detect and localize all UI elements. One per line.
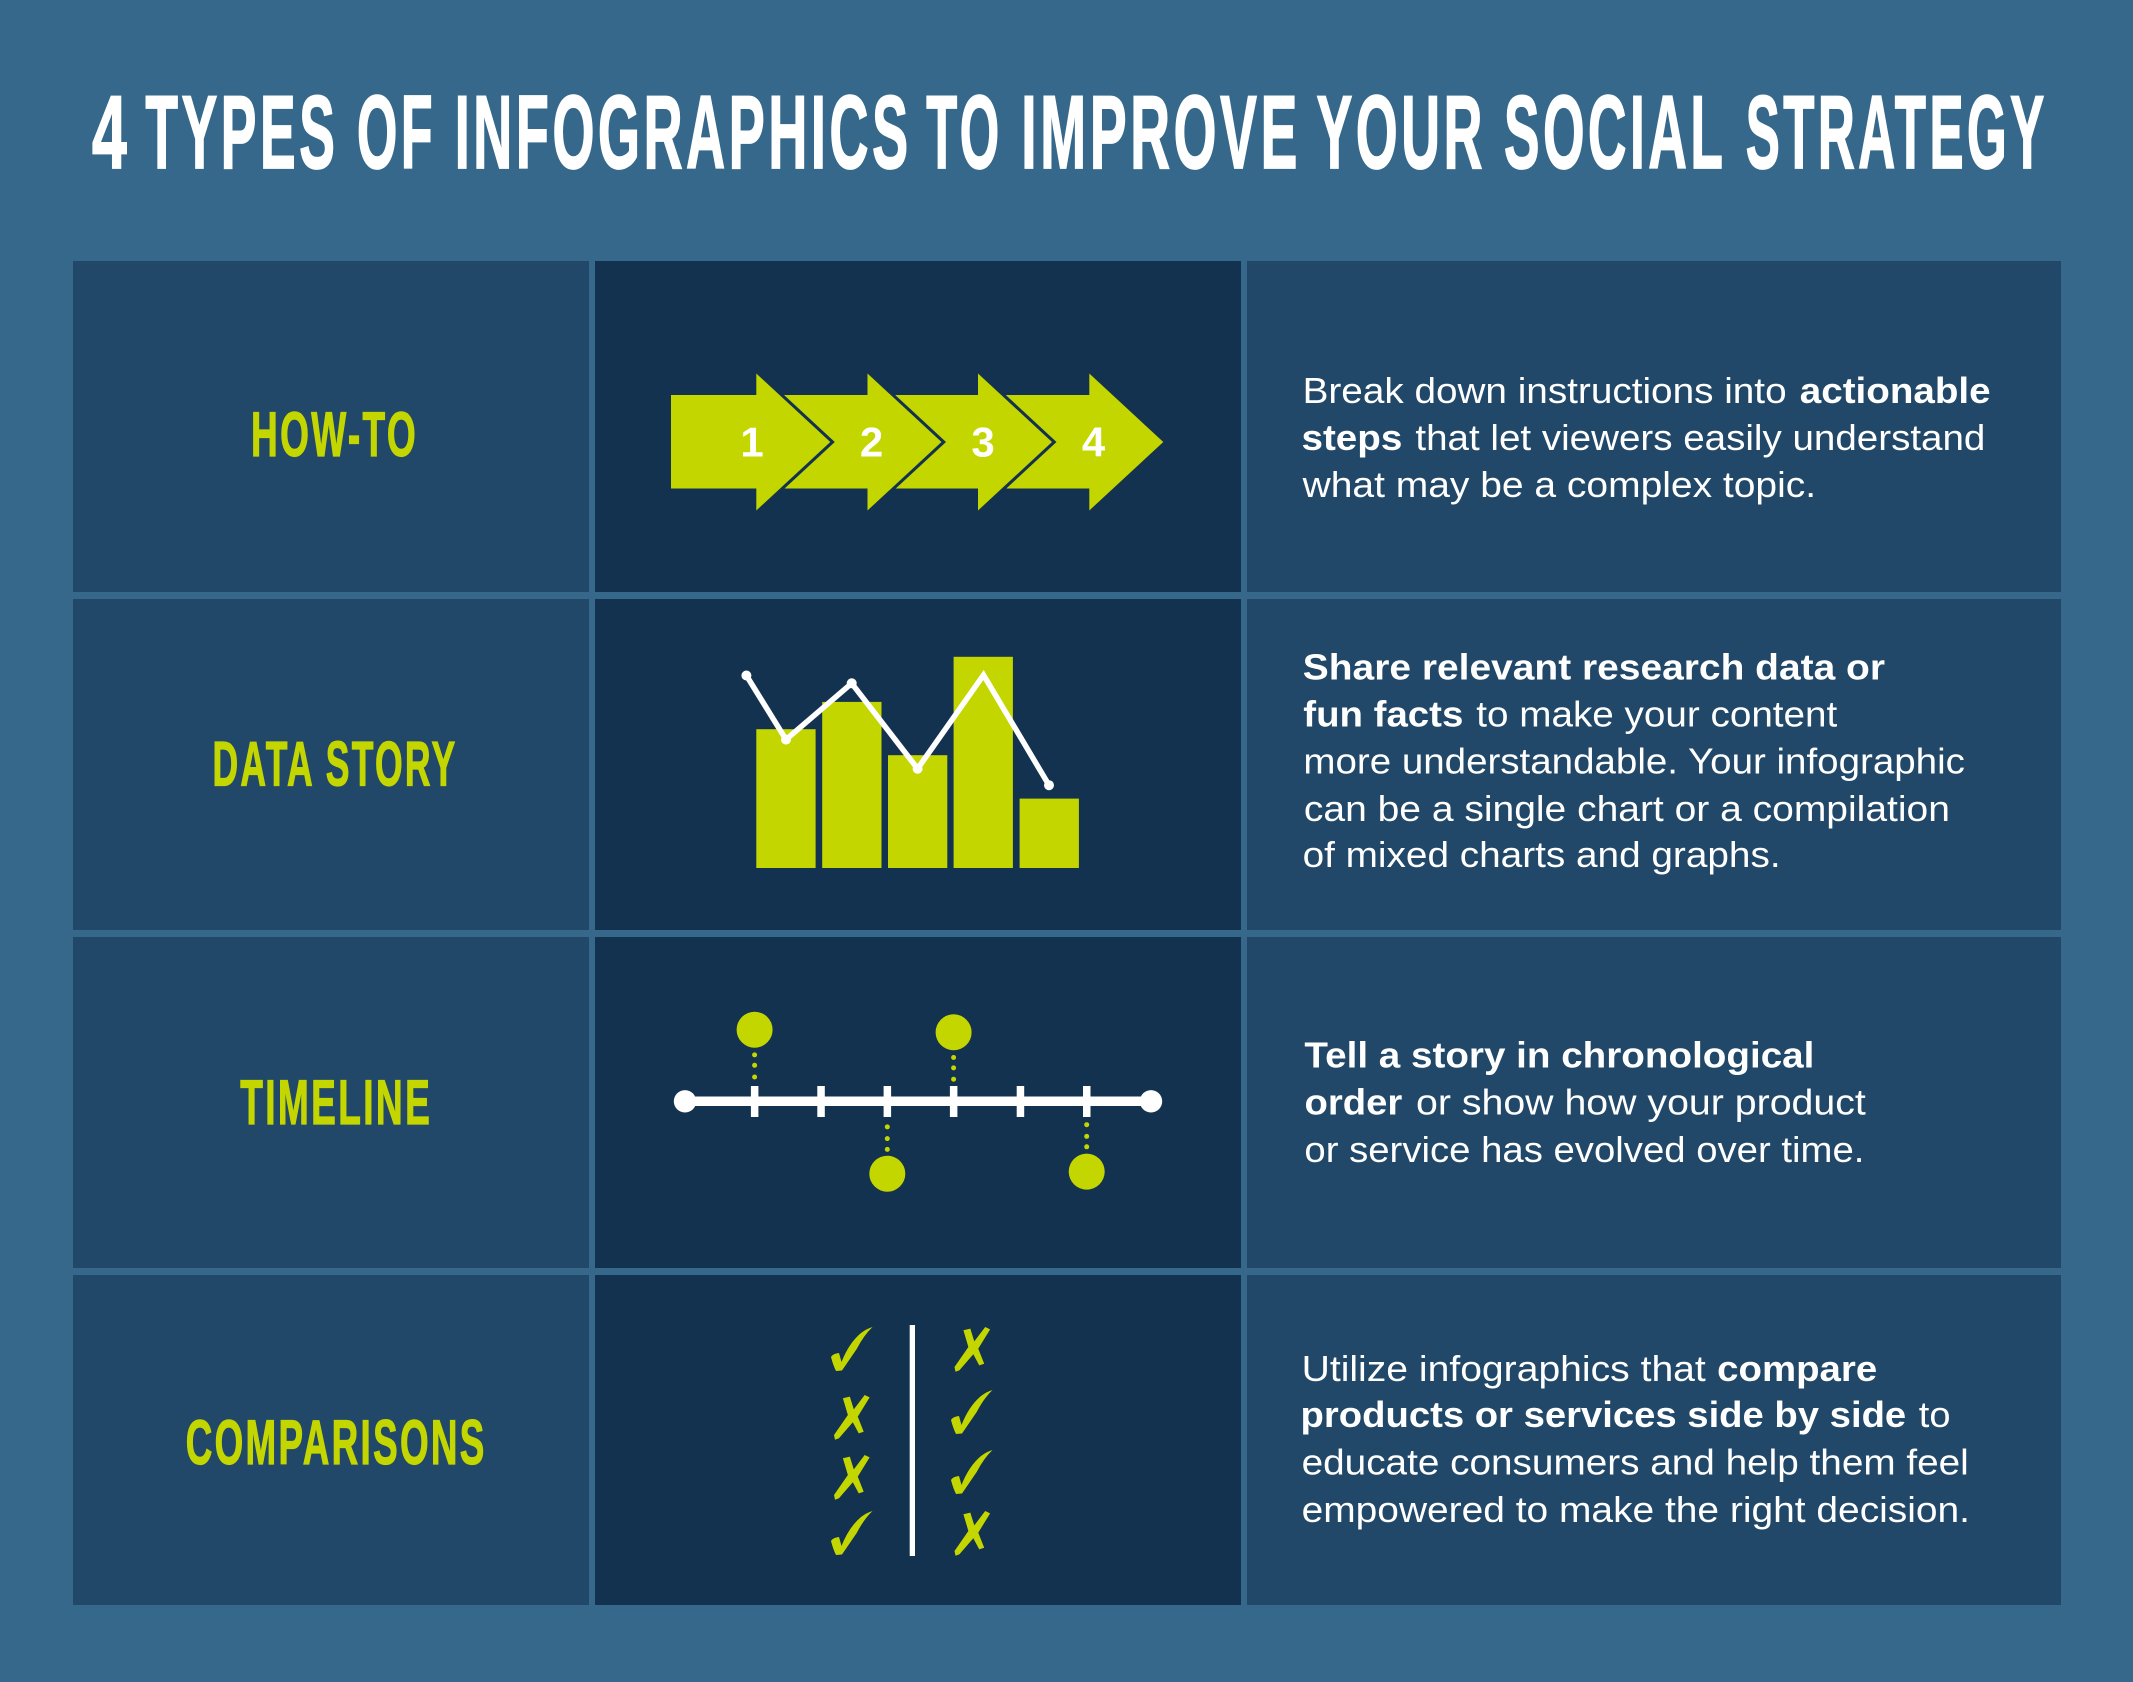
text: comparisons description: compare xyxy=(1717,1348,1877,1389)
text: data story description xyxy=(1303,646,1965,875)
title xyxy=(92,75,2048,191)
text: data story description: more understandable. Your infographic xyxy=(1303,741,1965,782)
title: YOUR xyxy=(1316,75,1486,191)
panel: timeline label xyxy=(73,937,589,1268)
title: TO xyxy=(926,75,1003,191)
panel: data story description xyxy=(1247,599,2061,930)
icon: four numbered arrows: 1 xyxy=(740,418,764,466)
icon: four numbered arrows xyxy=(671,374,1163,510)
text: comparisons description: educate consumers and help them feel xyxy=(1302,1442,1969,1483)
chart: bars with line xyxy=(741,657,1079,868)
text: comparisons description: products or services side by side xyxy=(1300,1394,1906,1435)
text: timeline description xyxy=(1304,1034,1866,1170)
icon: checks and crosses xyxy=(831,1325,992,1556)
heading: timeline: TIMELINE xyxy=(240,1068,432,1138)
text: data story description: Share relevant research data or xyxy=(1303,646,1885,687)
text: how-to description: actionable xyxy=(1800,370,1991,411)
text: timeline description: Tell a story in chronological xyxy=(1304,1034,1814,1075)
icon: four numbered arrows: 2 xyxy=(860,418,883,466)
heading: comparisons: COMPARISONS xyxy=(186,1408,487,1478)
panel: how-to description xyxy=(1247,261,2061,592)
panel: how-to label xyxy=(73,261,589,592)
text: how-to description: what may be a complex topic. xyxy=(1302,464,1816,505)
icon: four numbered arrows: 3 xyxy=(971,418,995,466)
text: how-to description xyxy=(1302,370,1991,505)
row: how-to xyxy=(73,261,2061,592)
chart: timeline xyxy=(674,1012,1162,1192)
text: data story description: of mixed charts and graphs. xyxy=(1303,834,1781,875)
title: 4 xyxy=(92,75,131,191)
panel: comparisons graphic xyxy=(595,1275,1241,1605)
title: IMPROVE xyxy=(1021,75,1301,191)
panel: timeline graphic xyxy=(595,937,1241,1268)
text: comparisons description: Utilize infographics that xyxy=(1302,1348,1706,1389)
panel: timeline description xyxy=(1247,937,2061,1268)
text: data story description: to make your content xyxy=(1476,693,1837,734)
row: data story xyxy=(73,599,2061,930)
heading: data story: DATA STORY xyxy=(212,730,458,800)
text: how-to description: Break down instructions into xyxy=(1303,370,1787,411)
text: data story description: fun facts xyxy=(1303,693,1463,734)
panel: data story label xyxy=(73,599,589,930)
text: timeline description: order xyxy=(1304,1082,1402,1123)
text: comparisons description xyxy=(1300,1348,1970,1530)
panel: data story graphic xyxy=(595,599,1241,930)
icon: four numbered arrows: 4 xyxy=(1082,418,1106,466)
panel: how-to graphic xyxy=(595,261,1241,592)
text: comparisons description: to xyxy=(1919,1394,1950,1435)
text: timeline description: or service has evolved over time. xyxy=(1304,1129,1864,1170)
title: SOCIAL xyxy=(1504,75,1726,191)
title: TYPES xyxy=(145,75,338,191)
text: comparisons description: empowered to make the right decision. xyxy=(1302,1489,1970,1530)
heading: how-to: HOW-TO xyxy=(251,400,418,470)
text: how-to description: that let viewers easily understand xyxy=(1415,417,1985,458)
row: comparisons xyxy=(73,1275,2061,1605)
title: OF xyxy=(357,75,436,191)
text: timeline description: or show how your product xyxy=(1416,1082,1866,1123)
text: data story description: can be a single chart or a compilation xyxy=(1304,788,1950,829)
panel: comparisons label xyxy=(73,1275,589,1605)
row: timeline xyxy=(73,937,2061,1268)
text: how-to description: steps xyxy=(1302,417,1402,458)
title: INFOGRAPHICS xyxy=(455,75,912,191)
panel: comparisons description xyxy=(1247,1275,2061,1605)
